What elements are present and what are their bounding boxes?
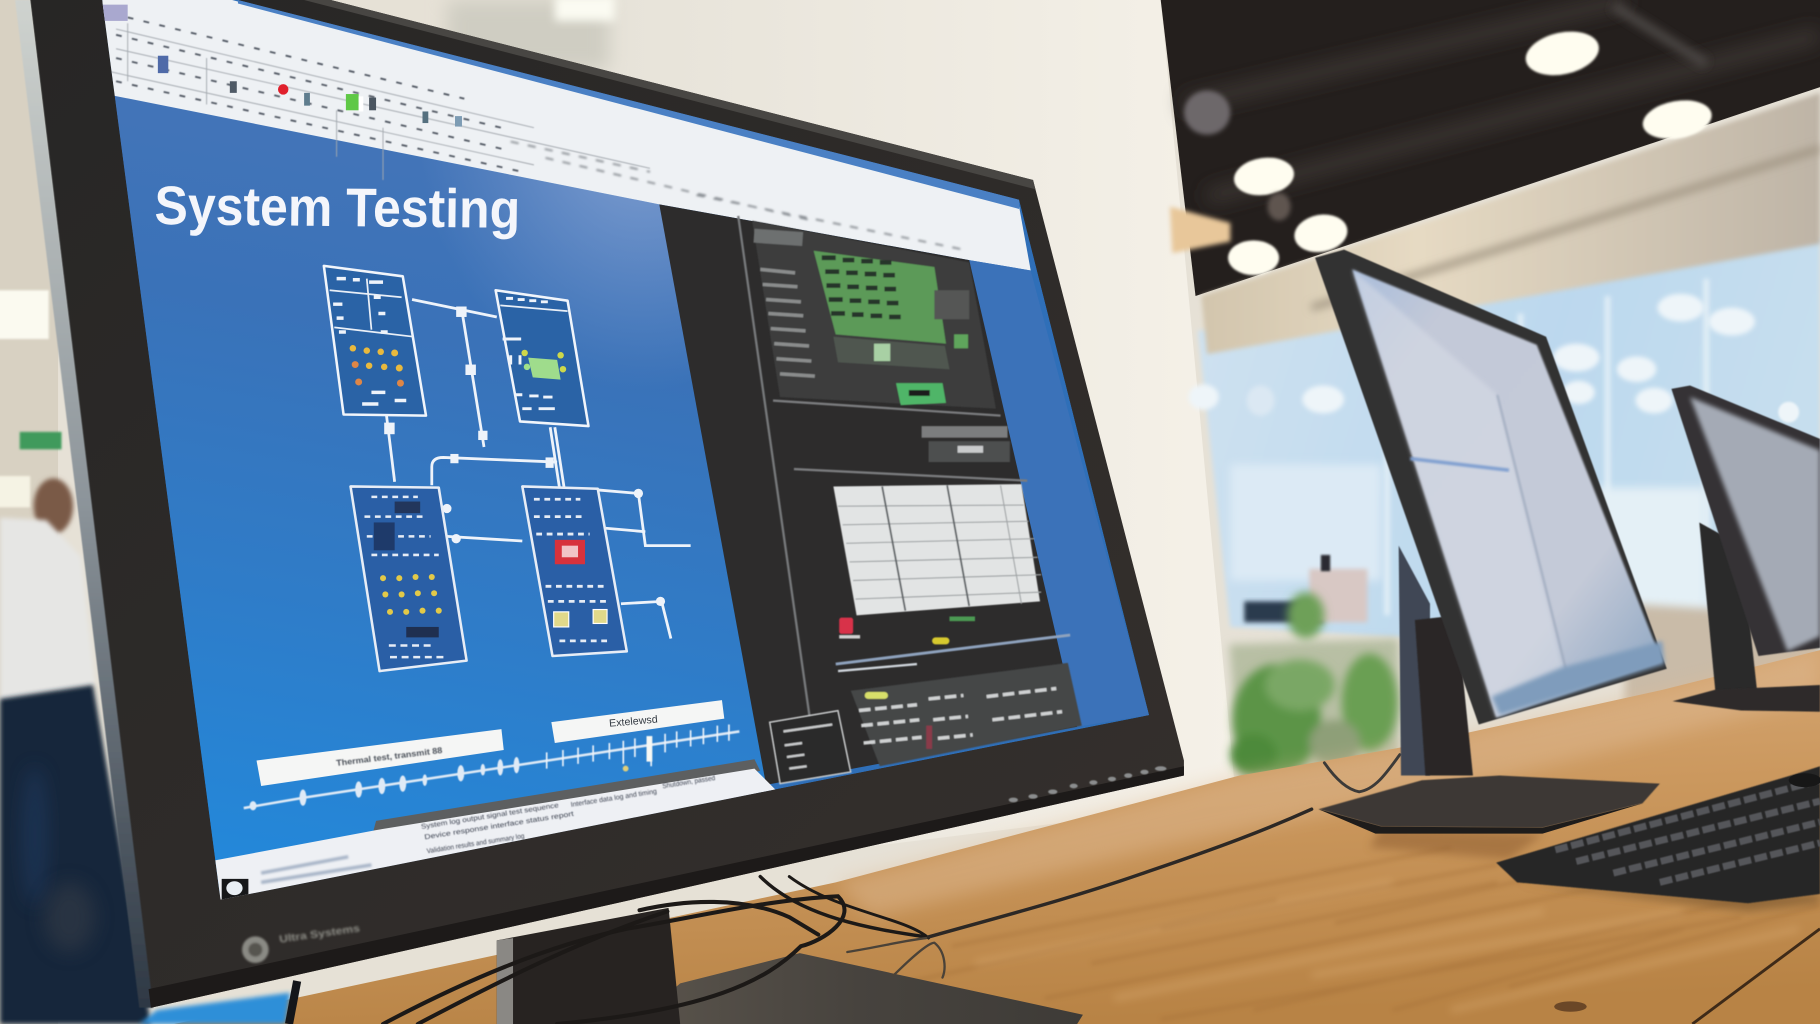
alert and status [836, 616, 1070, 671]
third monitor [1671, 385, 1820, 712]
label box right [551, 700, 724, 743]
top toolbar [102, 0, 1031, 271]
bottom log strip: System log output signal test sequence [421, 802, 559, 831]
bottom log strip: Interface data log and timing [570, 788, 657, 809]
title: System Testing [154, 175, 520, 240]
device 4 [522, 486, 627, 656]
keyboard [1496, 766, 1820, 911]
device 3 [351, 486, 467, 671]
main monitor screen [102, 0, 1149, 901]
label box left [257, 729, 504, 786]
ceiling and back office [1161, 0, 1820, 720]
bottom log strip: Validation results and summary log [426, 833, 525, 855]
timeline [244, 724, 739, 810]
monitor buttons [1009, 766, 1167, 802]
dark panel [659, 204, 1077, 785]
monitor brand logo: Ultra Systems [279, 923, 361, 946]
second monitor [1315, 250, 1667, 834]
monitor brand logo [242, 923, 361, 963]
green status grid [752, 221, 996, 409]
right blue margin [969, 260, 1149, 727]
bottom log strip: Device response interface status report [424, 811, 574, 841]
label box right: Extelewsd [609, 715, 658, 730]
device 2 [496, 290, 588, 426]
monitor stand, main [497, 908, 1083, 1024]
small readout [922, 426, 1010, 462]
side legend box [770, 711, 851, 784]
left background: person and lights [0, 290, 151, 1024]
wooden desk [139, 650, 1820, 1024]
bottom log strip [209, 759, 775, 901]
cables [383, 755, 1400, 1024]
main monitor bezel [15, 0, 1184, 1008]
lower dark tables [851, 663, 1082, 766]
plant [1229, 592, 1399, 780]
label box left: Thermal test, transmit 88 [336, 746, 443, 768]
device 1 [324, 266, 426, 416]
system diagram connectors [384, 300, 691, 639]
bottom log strip: Shutdown, passed [662, 775, 716, 790]
blue canvas [111, 95, 775, 894]
data table [833, 484, 1041, 615]
ceiling lights [1170, 25, 1799, 423]
